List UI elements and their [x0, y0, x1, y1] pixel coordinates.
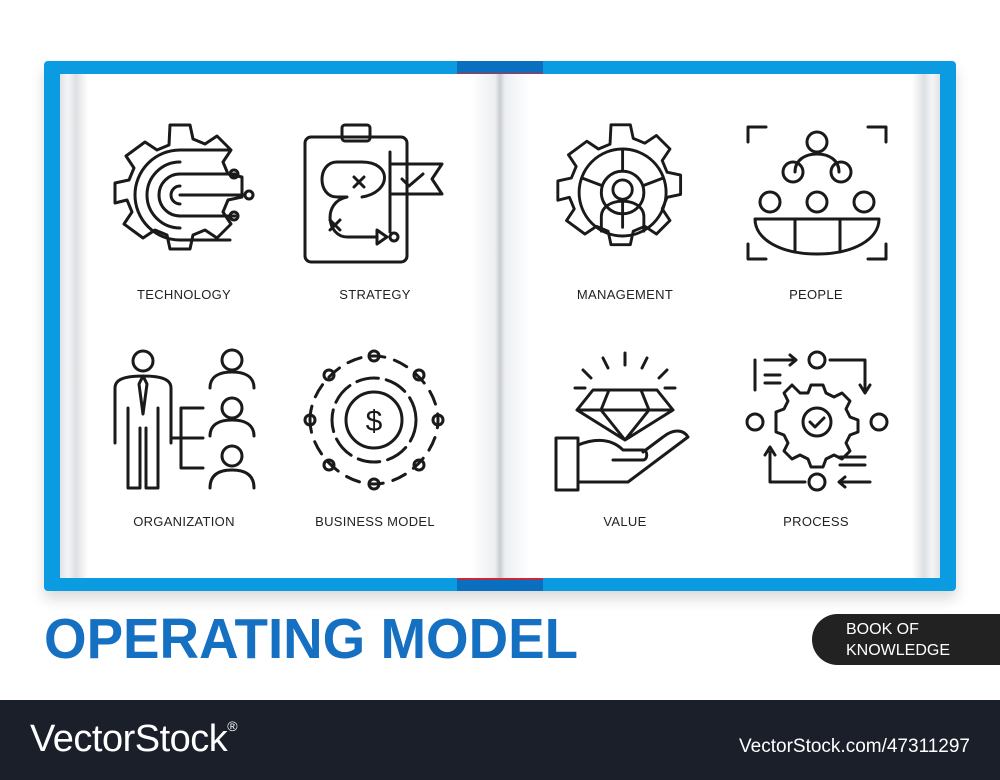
- label: business model: BUSINESS MODEL: [315, 514, 435, 529]
- spine band: [457, 61, 543, 591]
- icon: technology: [114, 124, 254, 250]
- label: strategy: STRATEGY: [339, 287, 411, 302]
- label: people: PEOPLE: [789, 287, 843, 302]
- badge: book of knowledge: KNOWLEDGE: [846, 642, 950, 659]
- badge: book of knowledge: [812, 614, 1000, 665]
- label: management: MANAGEMENT: [577, 287, 673, 302]
- icon: management: [556, 123, 682, 246]
- footer band: [0, 700, 1000, 780]
- book: [39, 61, 961, 604]
- icon: business model: [304, 350, 444, 490]
- icon: strategy: [304, 124, 444, 264]
- right page: [500, 74, 940, 578]
- icon: process: [746, 350, 888, 492]
- label: process: PROCESS: [783, 514, 849, 529]
- icon: organization: [114, 348, 256, 490]
- book cover: [44, 61, 956, 591]
- label: organization: ORGANIZATION: [133, 514, 235, 529]
- badge: book of knowledge: BOOK OF: [846, 621, 919, 638]
- icon: people: [746, 126, 888, 260]
- icon: value: [554, 352, 690, 492]
- left page: [60, 74, 500, 578]
- icon: business model: $: [366, 405, 383, 438]
- footer logo: VectorStock®: [30, 718, 237, 760]
- label: technology: TECHNOLOGY: [137, 287, 231, 302]
- label: value: VALUE: [603, 514, 647, 529]
- title: OPERATING MODEL: [44, 607, 578, 671]
- footer id: VectorStock.com/47311297: [739, 736, 970, 757]
